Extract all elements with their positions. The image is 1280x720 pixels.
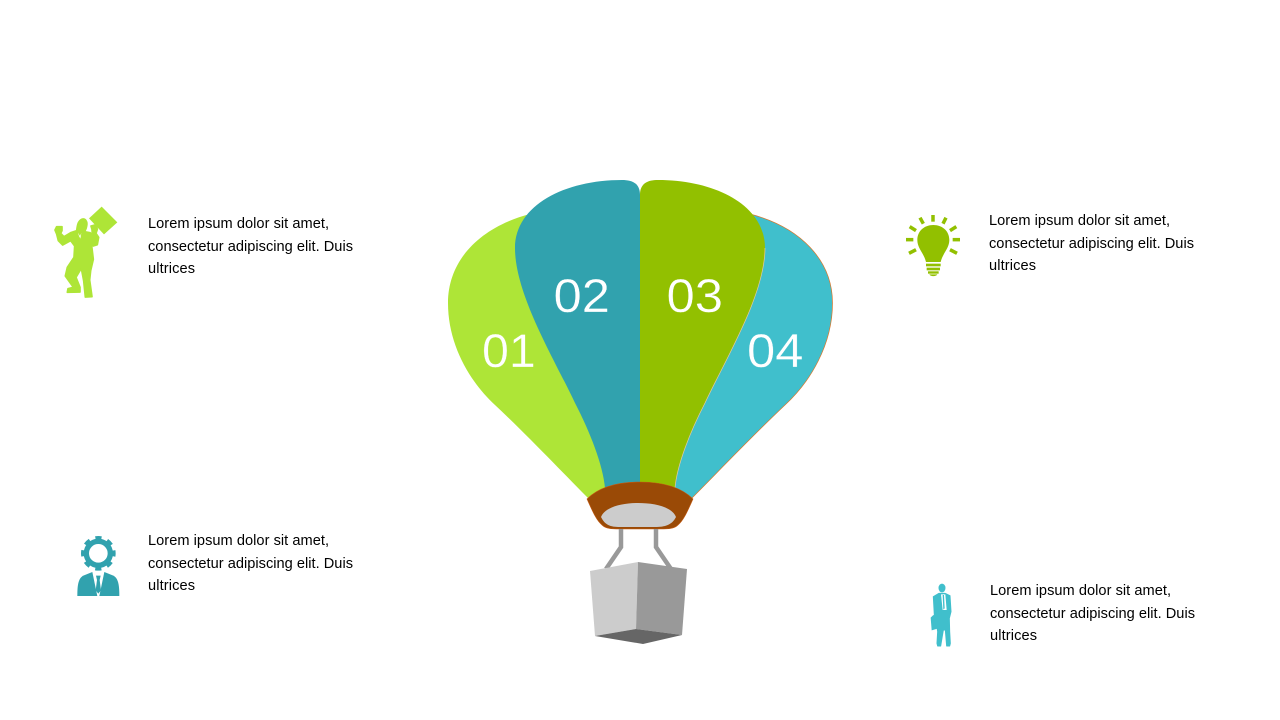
balloon panel 02 (515, 180, 640, 488)
text block 3: ultrices (989, 258, 1036, 274)
number 01: 01 (482, 326, 536, 378)
text block 2: ultrices (148, 578, 195, 594)
basket (590, 562, 687, 644)
text block 1: ultrices (148, 261, 195, 277)
hot air balloon (448, 180, 832, 644)
text block 1: Lorem ipsum dolor sit amet, (148, 216, 329, 232)
text block 3: consectetur adipiscing elit. Duis (989, 236, 1194, 252)
text block 4: Lorem ipsum dolor sit amet, (990, 583, 1171, 599)
number 04: 04 (747, 326, 803, 378)
number 03: 03 (666, 271, 723, 323)
balloon neck burner (587, 482, 693, 529)
text block 2: Lorem ipsum dolor sit amet, (148, 533, 329, 549)
text block 2: consectetur adipiscing elit. Duis (148, 556, 353, 572)
balloon panel 04 (668, 214, 832, 500)
number 02: 02 (554, 271, 610, 323)
icon: standing businessman with briefcase (931, 584, 951, 646)
item 3: icon and text (906, 213, 1194, 276)
text block 4: ultrices (990, 628, 1037, 644)
item 4: icon and text (931, 583, 1195, 646)
text block 3: Lorem ipsum dolor sit amet, (989, 213, 1170, 229)
icon: light bulb (906, 215, 960, 276)
icon: person with gear head (77, 538, 119, 596)
item 1: icon and text (55, 207, 353, 297)
item 2: icon and text (77, 533, 353, 596)
icon: celebrating businessman with briefcase (55, 207, 117, 297)
balloon panel 01 (448, 214, 612, 500)
text block 4: consectetur adipiscing elit. Duis (990, 606, 1195, 622)
balloon panel 03 (640, 180, 765, 488)
text block 1: consectetur adipiscing elit. Duis (148, 239, 353, 255)
basket ropes (606, 529, 671, 569)
